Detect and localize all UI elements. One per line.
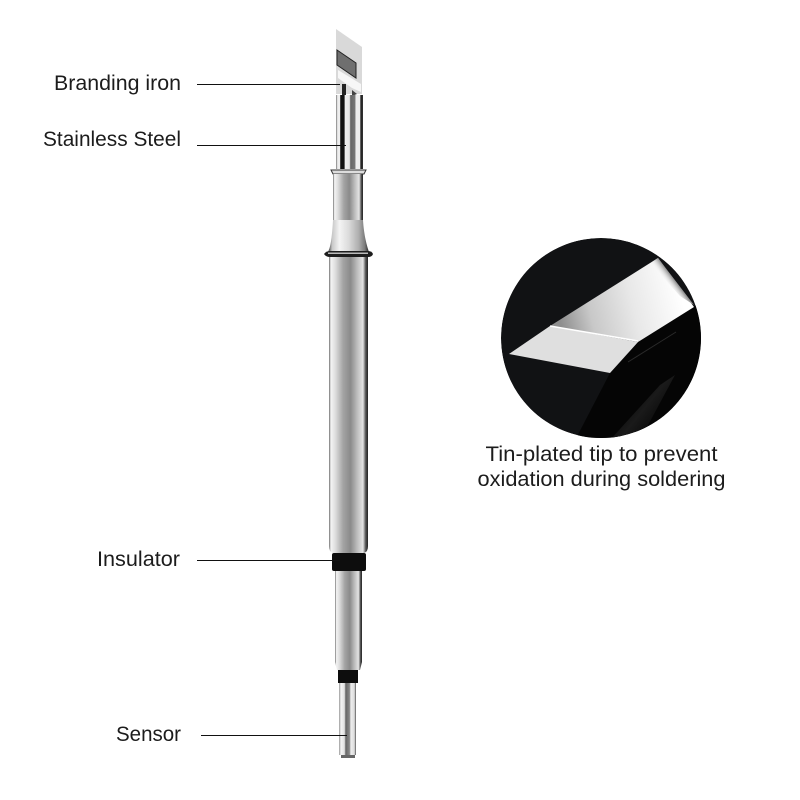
blade lower edge reflection [628, 332, 676, 362]
sensor end [341, 755, 355, 758]
blade flat tip [509, 326, 638, 373]
blade upper face [550, 258, 694, 342]
upper barrel and flare [324, 174, 373, 257]
label: Stainless Steel: Stainless Steel [43, 128, 181, 151]
shaft collar [331, 170, 366, 174]
blade end shading [650, 258, 694, 305]
sensor pin [339, 683, 356, 755]
magnified tip circle [501, 238, 701, 438]
soldering tip illustration [324, 29, 373, 758]
lower shadow [578, 306, 701, 438]
main barrel [329, 257, 368, 553]
caption: Tin-plated tip to prevent [486, 443, 718, 466]
circle background [501, 238, 701, 438]
caption [478, 443, 726, 491]
blade highlight [550, 326, 638, 341]
caption: oxidation during soldering [478, 468, 726, 491]
stainless steel shaft [336, 95, 363, 169]
label: Sensor: Sensor [116, 723, 181, 746]
lower barrel [335, 571, 362, 670]
label: Insulator: Insulator [97, 548, 180, 571]
label: Branding iron: Branding iron [54, 72, 181, 95]
insulator ring [332, 553, 366, 571]
tip blade [336, 29, 362, 96]
second black ring [338, 670, 358, 683]
